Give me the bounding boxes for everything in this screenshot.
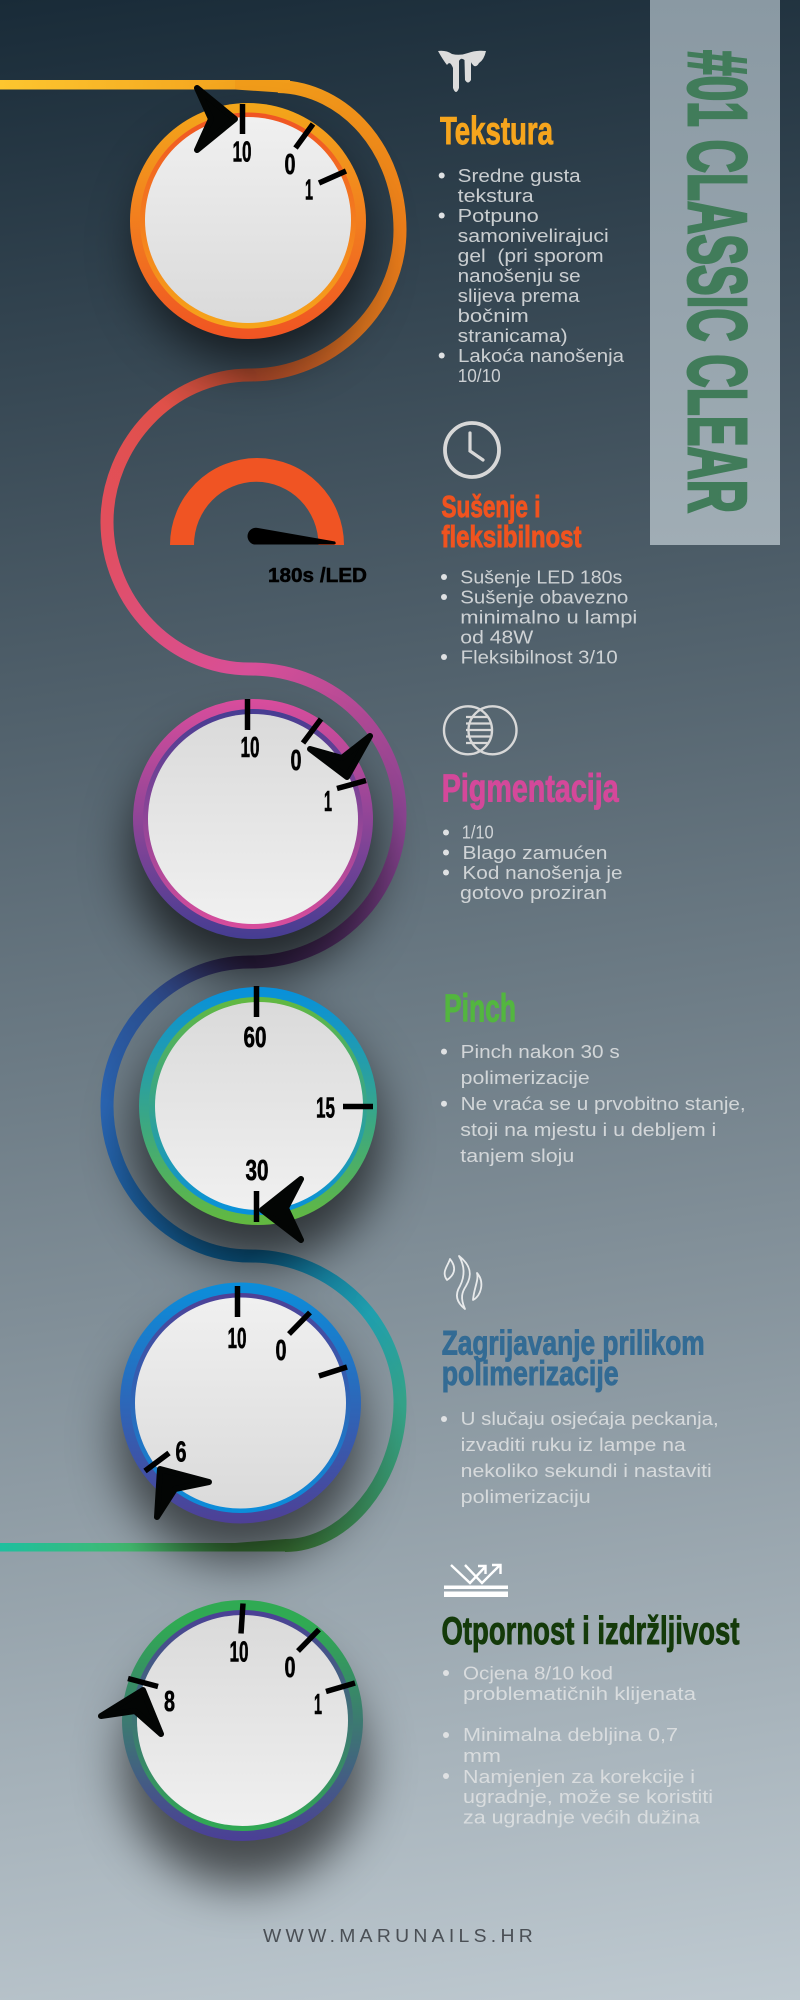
section: Pinch [441, 988, 746, 1166]
heading: Tekstura: Tekstura [440, 110, 553, 153]
section: Otpornost [442, 1610, 740, 1828]
text block: Pinch bullets: tanjem sloju [460, 1146, 574, 1166]
pointer [262, 1179, 301, 1240]
text block: Sušenje bullets: Sušenje obavezno [460, 588, 628, 608]
heading: Sušenje i fleksibilnost [442, 489, 582, 554]
section: Pigmentacija [442, 768, 622, 903]
text block: Otpornost bullets: problematičnih klijenata [463, 1684, 697, 1704]
dial: Zagrijavanje: 10 [228, 1323, 246, 1355]
text block: Sušenje bullets: od 48W [460, 628, 533, 648]
heading: Zagrijavanje prilikom polimerizacije: polimerizacije [442, 1355, 619, 1393]
heading: Sušenje i fleksibilnost: Sušenje i [442, 489, 540, 524]
text block: Tekstura bullets: 10/10 [458, 366, 501, 386]
winding ribbon path [0, 80, 400, 1552]
heading: Zagrijavanje prilikom polimerizacije: Zagrijavanje prilikom [442, 1324, 705, 1362]
text block: Pigmentacija bullets [443, 822, 622, 903]
text block: Otpornost bullets [443, 1664, 713, 1828]
gauge label: 180s /LED [268, 565, 367, 587]
dial: Pigmentacija: 1 [324, 786, 332, 818]
text block: Tekstura bullets: bočnim [458, 306, 529, 326]
title panel [650, 0, 780, 545]
dial: Otpornost: 8 [164, 1686, 175, 1718]
dial shadows [118, 134, 382, 1885]
dial: Otpornost: 0 [284, 1652, 296, 1684]
heading: Zagrijavanje prilikom polimerizacije [442, 1324, 705, 1393]
text block: Zagrijavanje bullets: izvaditi ruku iz lampe na [461, 1435, 687, 1455]
text block: Zagrijavanje bullets: polimerizaciju [461, 1487, 591, 1507]
text block: Tekstura bullets: nanošenju se [458, 266, 581, 286]
text block: Tekstura bullets: stranicama) [458, 326, 568, 346]
speed gauge 180s [170, 458, 367, 587]
text block: Zagrijavanje bullets: U slučaju osjećaja peckanja, [461, 1409, 719, 1429]
text block: Tekstura bullets: slijeva prema [458, 286, 581, 306]
icon: heat waves [445, 1256, 481, 1309]
section: Sušenje i fleksibilnost [441, 489, 637, 668]
heading: Pigmentacija: Pigmentacija [442, 768, 619, 810]
text block: Otpornost bullets: Minimalna debljina 0,7 [463, 1725, 678, 1745]
dial: Zagrijavanje [120, 1282, 361, 1524]
text block: Otpornost bullets: Ocjena 8/10 kod [463, 1664, 613, 1684]
text block: Sušenje bullets: Fleksibilnost 3/10 [461, 648, 618, 668]
text block: Zagrijavanje bullets [441, 1409, 719, 1507]
text block: Pigmentacija bullets: 1/10 [462, 822, 494, 842]
text block: Pigmentacija bullets: gotovo proziran [460, 883, 607, 903]
title text: #01 CLASSIC CLEAR [671, 50, 764, 513]
pointer [197, 88, 235, 150]
dial: Tekstura: 0 [284, 149, 296, 181]
dial: Pinch: 60 [244, 1022, 266, 1054]
dial: Pinch: 30 [246, 1155, 268, 1187]
text block: Sušenje bullets: minimalno u lampi [460, 608, 637, 628]
pointer [157, 1469, 209, 1517]
dial: Zagrijavanje: 0 [276, 1335, 286, 1367]
text block: Pinch bullets [441, 1042, 746, 1166]
dial: Otpornost: 1 [314, 1689, 322, 1721]
heading: Pinch: Pinch [444, 988, 516, 1031]
text block: Otpornost bullets: ugradnje, može se koristiti [463, 1787, 713, 1807]
text block: Sušenje bullets: Sušenje LED 180s [460, 568, 622, 588]
dial: Pinch: 15 [316, 1092, 335, 1124]
text block: Tekstura bullets: tekstura [458, 186, 535, 206]
text block: Tekstura bullets: Potpuno [458, 206, 539, 226]
section: Tekstura [439, 110, 625, 386]
text block: Otpornost bullets: mm [463, 1746, 501, 1766]
footer url: WWW.MARUNAILS.HR [263, 1926, 537, 1946]
text block: Pigmentacija bullets: Kod nanošenja je [462, 863, 622, 883]
text block: Pigmentacija bullets: Blago zamućen [462, 843, 608, 863]
dial: Pigmentacija: 0 [290, 745, 302, 777]
dial: Otpornost: 10 [230, 1636, 248, 1668]
section: Zagrijavanje [441, 1324, 719, 1507]
text block: Zagrijavanje bullets: nekoliko sekundi i nastaviti [461, 1461, 712, 1481]
text block: Tekstura bullets: gel (pri sporom [458, 246, 604, 266]
pointer [101, 1690, 161, 1734]
dial: Tekstura: 10 [232, 136, 252, 168]
dial: Pinch [139, 986, 377, 1240]
pointer [310, 736, 370, 777]
icon: clock [445, 423, 499, 477]
text block: Tekstura bullets: Lakoća nanošenja [458, 346, 625, 366]
dial: Tekstura: 1 [305, 174, 313, 206]
text block: Tekstura bullets: samonivelirajuci [458, 226, 609, 246]
text block: Pinch bullets: stoji na mjestu i u debljem i [460, 1120, 716, 1140]
text block: Otpornost bullets: Namjenjen za korekcije i [463, 1767, 695, 1787]
dial: Otpornost [101, 1600, 363, 1841]
text block: Pinch bullets: Ne vraća se u prvobitno stanje, [461, 1094, 746, 1114]
dial: Pigmentacija [133, 699, 373, 939]
dial: Pigmentacija: 10 [240, 732, 260, 764]
icon: resistance arrows [444, 1565, 508, 1597]
text block: Otpornost bullets: za ugradnje većih dužina [463, 1808, 701, 1828]
gauge needle [248, 528, 336, 544]
icon: overlapping circles [444, 706, 516, 754]
icon: dripping gel [438, 51, 486, 92]
heading: Sušenje i fleksibilnost: fleksibilnost [442, 519, 582, 554]
text block: Tekstura bullets [439, 166, 625, 386]
text block: Pinch bullets: polimerizacije [461, 1068, 590, 1088]
dial: Zagrijavanje: 6 [176, 1436, 186, 1468]
text block: Pinch bullets: Pinch nakon 30 s [461, 1042, 620, 1062]
text block: Sušenje bullets [441, 568, 637, 668]
text block: Tekstura bullets: Sredne gusta [458, 166, 582, 186]
dial: Tekstura [130, 88, 366, 339]
